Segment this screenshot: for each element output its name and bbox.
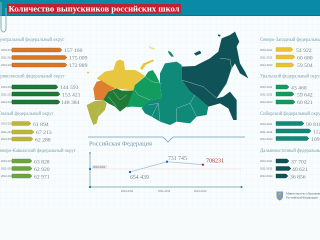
panel: Siberian federal district: 2010-2011 [260, 122, 273, 126]
divider with notch [88, 137, 245, 142]
line chart: 2010-2011 [93, 165, 106, 169]
panel: Far Eastern federal district: 36 856 [290, 174, 306, 180]
panel: Central federal district: 2011-2012 [1, 56, 14, 60]
region: Central (orange) [93, 81, 115, 100]
panel: North Caucasian federal district: 2011-2012 [1, 166, 14, 170]
panel: Urals federal district: 59 642 [297, 92, 313, 98]
panel: Siberian federal district [260, 112, 320, 143]
panel: Southern federal district: 67 213 [36, 130, 52, 136]
panel: Southern federal district: 2010-2011 [1, 122, 14, 126]
panel: Central federal district [0, 38, 88, 69]
line chart [89, 152, 242, 193]
line chart: 708231 [206, 158, 224, 164]
panel: Urals federal district: 2011-2012 [260, 92, 273, 96]
panel: Volga federal district: 2012-2013 [1, 100, 14, 104]
panel: Volga federal district: 144 593 [60, 85, 79, 91]
panel: North Caucasian federal district: 62 920 [34, 167, 50, 173]
region: Far East (dark teal) [182, 32, 248, 120]
panel: Far Eastern federal district: 2010-2011 [260, 159, 273, 163]
panel: North Caucasian federal district: 2012-2013 [1, 174, 14, 178]
region: Siberia (teal) [142, 51, 208, 125]
panel: North Caucasian federal district [0, 149, 76, 180]
panel: Central federal district: 172 889 [69, 63, 88, 69]
panel: Siberian federal district: 2012-2013 [260, 137, 273, 141]
line chart: 731 745 [168, 156, 187, 162]
line chart: 2010-2011 [121, 189, 134, 193]
panel: Southern federal district: 62 288 [35, 138, 51, 144]
panel: Volga federal district [0, 74, 81, 106]
panel: Central federal district: 2010-2011 [1, 48, 14, 52]
map of Russia [87, 32, 248, 125]
panel: Siberian federal district: 2011-2012 [260, 130, 273, 134]
panel: Southern federal district: 2012-2013 [1, 137, 14, 141]
panel: Far Eastern federal district: 2011-2012 [260, 166, 273, 170]
panel: North Caucasian federal district: 2010-2011 [1, 159, 14, 163]
panel: Southern federal district [0, 112, 54, 144]
panel: Urals federal district: Уральский федеральный округ [260, 74, 320, 80]
panel: Far Eastern federal district: 37 702 [291, 160, 307, 166]
panel: North Caucasian federal district: 63 828 [34, 160, 50, 166]
heading: Russian Federation: Российская Федерация [89, 140, 152, 148]
region: South (yellow-green) [87, 100, 107, 125]
panel: Volga federal district: 2011-2012 [1, 92, 14, 96]
icon: paperclip [1, 2, 6, 32]
panel: Northwest federal district: 2010-2011 [260, 48, 273, 52]
panel: Volga federal district: 148 384 [61, 100, 80, 106]
panel: Urals federal district [260, 74, 320, 106]
logo: ministry of education: Российской Федерации [286, 196, 318, 200]
title: Количество выпускников российских школ [8, 4, 180, 13]
panel: Central federal district: 2012-2013 [1, 63, 14, 67]
header band [0, 0, 320, 16]
panel: North Caucasian federal district: 62 971 [34, 174, 50, 180]
region: Volga (dark green) [103, 88, 135, 112]
panel: Urals federal district: 60 821 [297, 100, 313, 106]
line chart: 654 439 [130, 175, 149, 181]
region: Northwest (yellow) [87, 46, 155, 91]
panel: Central federal district: 157 160 [64, 48, 83, 54]
panel: Far Eastern federal district [260, 149, 320, 180]
panel: Northwest federal district: 54 922 [296, 48, 312, 54]
panel: Central federal district: 175 009 [69, 56, 88, 62]
panel: Northwest federal district: 60 680 [297, 56, 313, 62]
logo: ministry of education [276, 192, 320, 200]
panel: Far Eastern federal district: 2012-2013 [260, 174, 273, 178]
panel: Far Eastern federal district: 40 621 [292, 167, 308, 173]
panel: Northwest federal district: 2012-2013 [260, 63, 273, 67]
panel: Volga federal district: 2010-2011 [1, 85, 14, 89]
panel: Volga federal district: 153 421 [62, 92, 81, 98]
panel: Southern federal district: 61 894 [33, 122, 49, 128]
panel: Northwest federal district: 59 504 [297, 63, 313, 69]
panel: Urals federal district: 2010-2011 [260, 85, 273, 89]
panel: Northwest federal district: 2011-2012 [260, 56, 273, 60]
panel: Urals federal district: 43 460 [291, 86, 307, 92]
line chart: 2011-2012 [158, 189, 171, 193]
line chart: 2012-2013 [194, 189, 207, 193]
region: Urals (medium green) [127, 70, 162, 107]
panel: Urals federal district: 2012-2013 [260, 100, 273, 104]
panel: Northwest federal district [260, 38, 320, 69]
panel: Southern federal district: 2011-2012 [1, 130, 14, 134]
